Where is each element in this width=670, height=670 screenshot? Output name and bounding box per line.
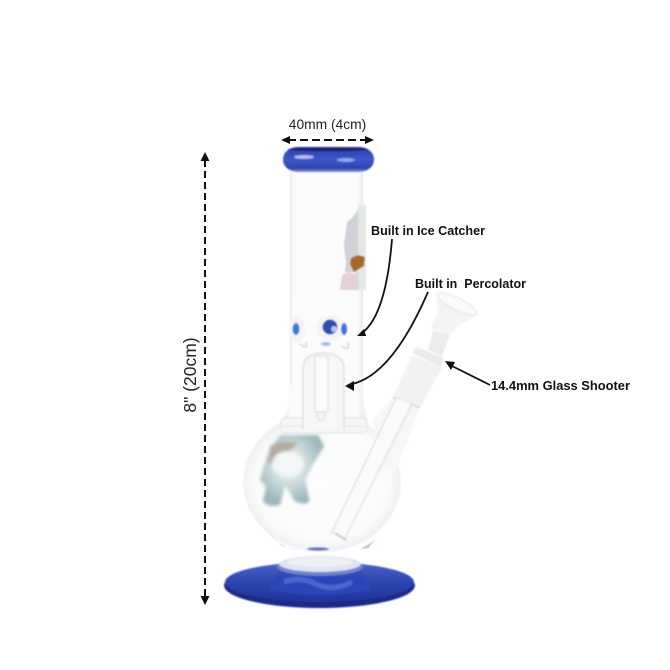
arrow: percolator xyxy=(345,292,428,391)
label: height: 8" (20cm) xyxy=(180,337,200,413)
dimension: width arrow xyxy=(281,136,374,144)
label: percolator: Built in Percolator xyxy=(415,277,526,291)
sticker on tube xyxy=(340,205,366,290)
side arm and joint xyxy=(372,289,479,470)
label: glass shooter: 14.4mm Glass Shooter xyxy=(491,379,630,393)
base neck xyxy=(277,556,363,576)
base plate xyxy=(224,562,415,608)
label: ice catcher: Built in Ice Catcher xyxy=(371,224,485,238)
downstem xyxy=(331,398,412,540)
top ring xyxy=(283,147,374,172)
sticker on bulb xyxy=(260,435,324,506)
label: width: 40mm (4cm) xyxy=(289,117,366,132)
arrow: glass shooter xyxy=(445,361,490,385)
dimension: height arrow xyxy=(200,152,210,605)
bulb chamber xyxy=(243,412,401,552)
icon: glass water pipe xyxy=(224,147,479,608)
main tube xyxy=(281,170,367,433)
arrow: ice catcher xyxy=(357,239,392,336)
percolator dome xyxy=(303,353,344,430)
ice catcher dimples xyxy=(289,315,348,348)
